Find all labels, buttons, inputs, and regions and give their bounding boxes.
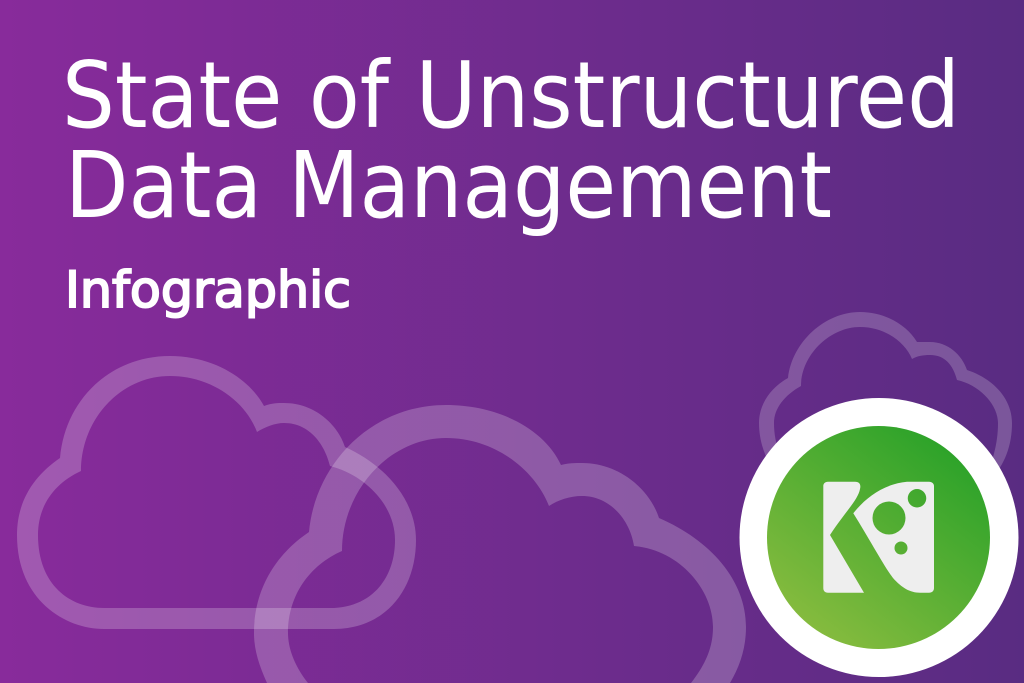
white ring [740, 398, 1018, 677]
title [62, 42, 960, 239]
green disc [767, 426, 990, 649]
icon: large centre cloud outline [254, 405, 746, 683]
icon: large left cloud outline [17, 356, 416, 629]
logo badge [740, 398, 1018, 677]
logo mark: K [823, 482, 934, 593]
title: Data Management [65, 132, 832, 239]
icon: right cloud outline [759, 312, 1012, 480]
subtitle: Infographic [65, 261, 351, 319]
